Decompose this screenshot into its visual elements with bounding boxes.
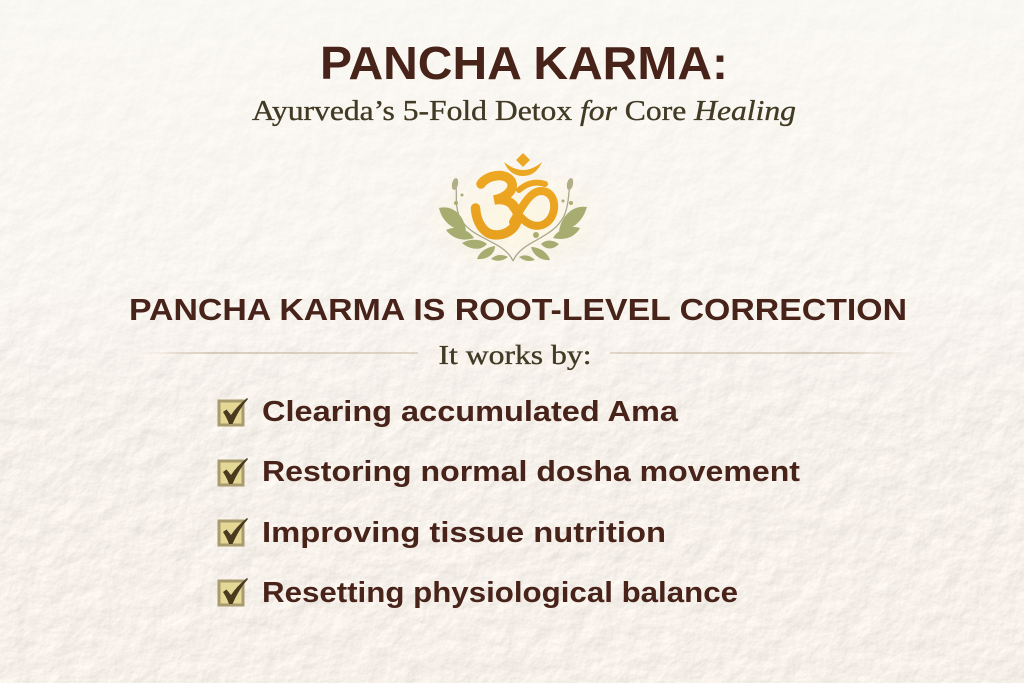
item 2: Restoring normal dosha movement [262, 456, 800, 488]
lead-in text: It works by: [438, 340, 592, 370]
icon: crescent [504, 162, 542, 176]
item 4: Resetting physiological balance [262, 577, 738, 609]
icon: leaves [439, 178, 587, 261]
checklist [219, 396, 800, 609]
item 3: Improving tissue nutrition [262, 517, 666, 549]
section heading: PANCHA KARMA IS ROOT-LEVEL CORRECTION [129, 292, 907, 327]
subtitle: Ayurveda’s 5-Fold Detox for Core Healing [252, 96, 796, 127]
icon: diamond dot [516, 153, 530, 167]
icon: om glyph [476, 176, 554, 235]
title: PANCHA KARMA: [320, 37, 728, 89]
item 1: Clearing accumulated Ama [262, 396, 679, 428]
divider right [610, 352, 912, 354]
divider left [140, 352, 418, 354]
icon: stems [456, 186, 570, 261]
icon: om with leaves [416, 153, 616, 276]
